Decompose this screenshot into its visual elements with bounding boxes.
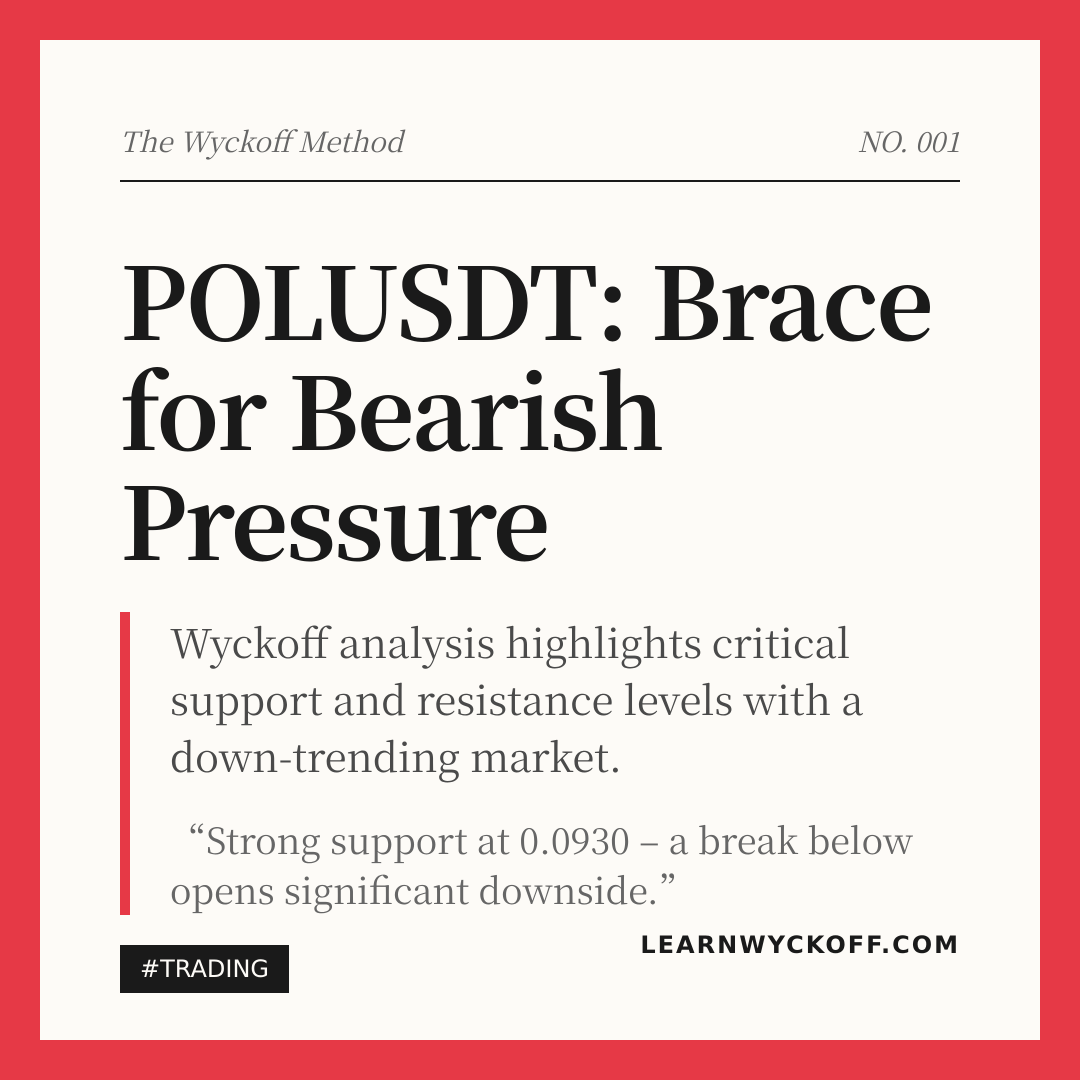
title: for Bearish	[120, 335, 663, 479]
summary text	[170, 613, 864, 784]
quote: opens significant downside.”	[170, 864, 695, 915]
hashtag tag: #TRADING	[140, 955, 269, 983]
header issue number: NO. 001	[857, 121, 960, 161]
summary text: down-trending market.	[170, 727, 622, 784]
hashtag tag	[120, 945, 289, 993]
header series name: The Wyckoff Method	[120, 121, 403, 161]
summary text: support and resistance levels with a	[170, 670, 864, 727]
title	[120, 225, 932, 589]
title: POLUSDT: Brace	[120, 225, 932, 369]
quote	[170, 814, 913, 915]
quote: “Strong support at 0.0930 – a break below	[170, 814, 913, 865]
title: Pressure	[120, 445, 548, 589]
summary text: Wyckoff analysis highlights critical	[170, 613, 850, 670]
website: LEARNWYCKOFF.COM	[640, 931, 960, 959]
accent bar	[120, 612, 130, 915]
